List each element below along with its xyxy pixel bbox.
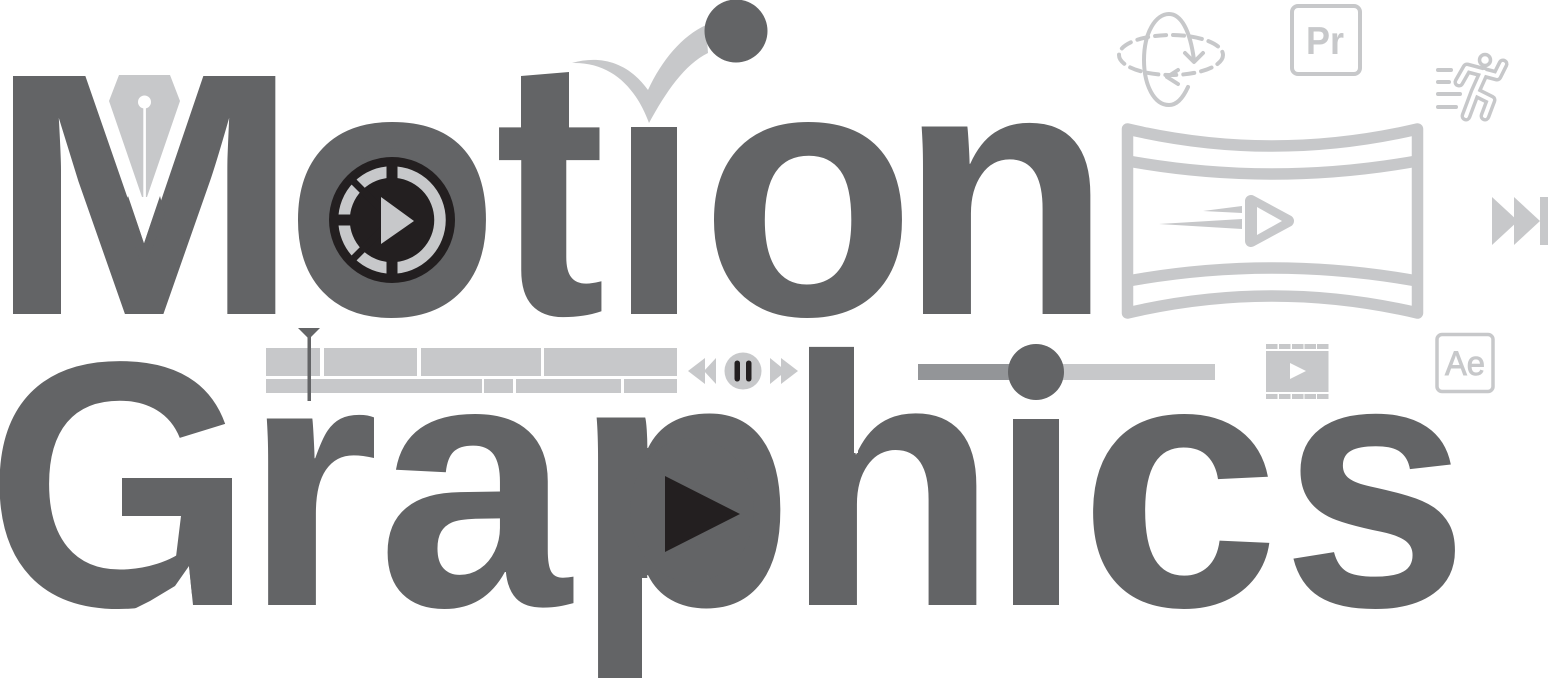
letter t: t	[495, 0, 605, 389]
icon: After Effects badge	[1437, 334, 1493, 392]
letter h: h	[785, 283, 998, 678]
letter c: c	[1079, 283, 1280, 678]
letter i: i	[990, 286, 1083, 678]
playhead	[298, 328, 320, 401]
letter o with player icon base: o	[284, 0, 500, 391]
play symbol with speed lines	[1159, 201, 1288, 241]
letter a: a	[377, 283, 573, 678]
icon: bouncing ball check swoosh	[572, 0, 768, 123]
filled play triangle in p	[630, 438, 754, 582]
icon: curved video frame	[1128, 129, 1418, 313]
letter n: n	[899, 0, 1112, 390]
letter i: i	[608, 0, 701, 390]
letter p: p	[573, 284, 795, 678]
title word: Graphics	[0, 283, 1469, 678]
ball	[704, 0, 768, 62]
label Ae: Ae	[1445, 345, 1485, 383]
icon: film strip	[1266, 344, 1328, 399]
timeline track	[266, 328, 677, 401]
label Pr: Pr	[1306, 20, 1344, 63]
icon: skip forward	[1492, 197, 1548, 245]
icon: Premiere Pro badge	[1292, 6, 1360, 74]
title word: Motion	[0, 0, 1112, 391]
playback controls	[688, 352, 798, 390]
letter s: s	[1282, 284, 1469, 678]
icon: orbit rotation	[1119, 14, 1223, 105]
slider	[918, 344, 1215, 400]
letter o: o	[700, 0, 916, 391]
icon: circular play button	[329, 148, 455, 292]
icon: running figure	[1438, 54, 1503, 116]
letter r: r	[244, 287, 379, 678]
icon: pen nib	[87, 70, 201, 243]
